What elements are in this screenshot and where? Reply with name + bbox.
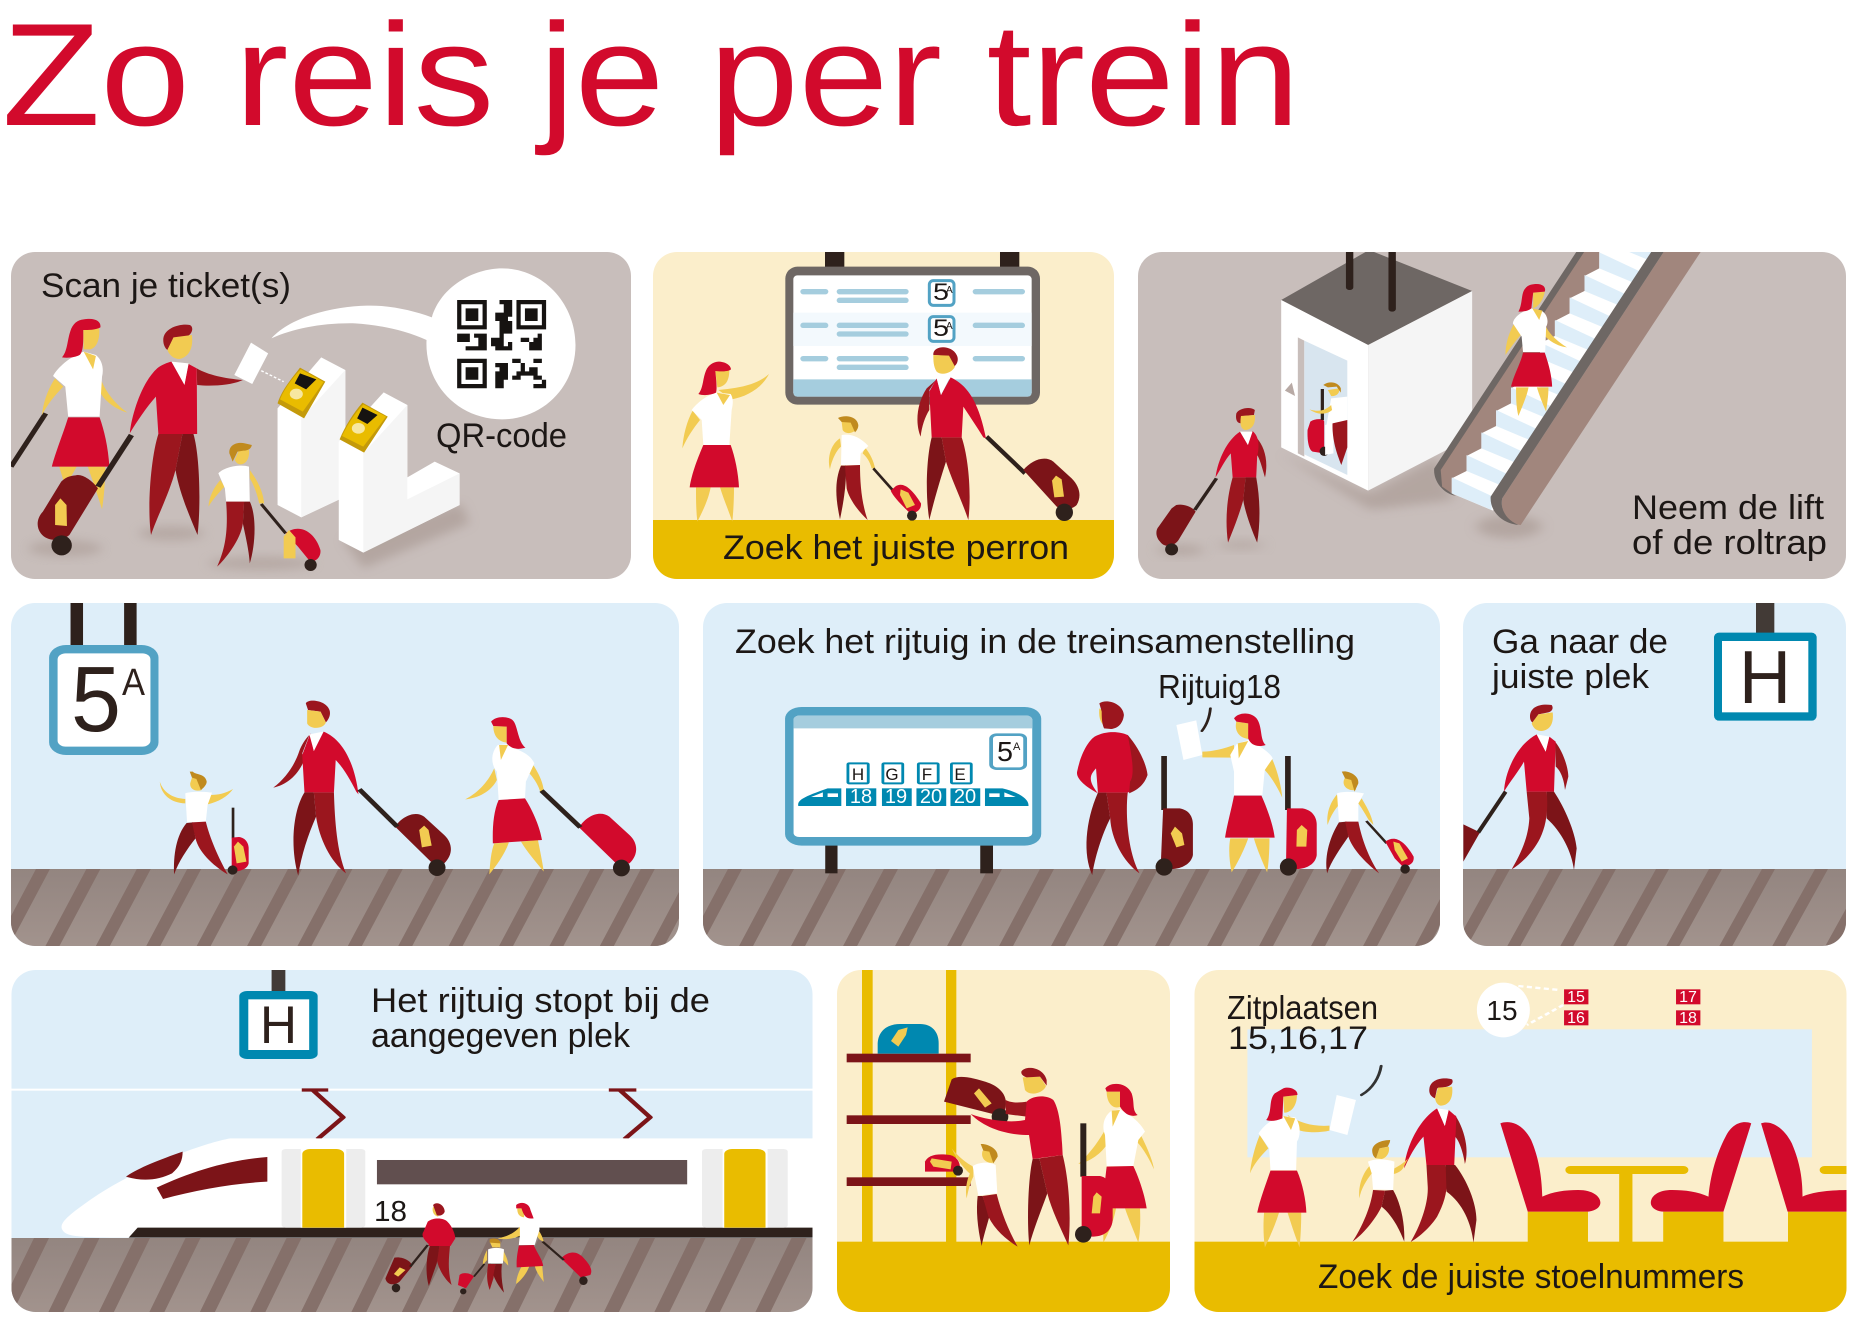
figure: man holding ticket xyxy=(130,325,284,535)
panel: scan je ticket xyxy=(11,252,631,579)
seat labels: 15 xyxy=(1567,989,1585,1006)
icon: ticket gates xyxy=(278,357,460,553)
text: juiste plek: juiste plek xyxy=(1491,658,1650,696)
luggage rack xyxy=(847,968,971,1243)
suitcase: dark red xyxy=(1156,756,1193,876)
coach number 18: 18 xyxy=(374,1196,407,1228)
seat labels xyxy=(1567,989,1697,1027)
figure: woman holding ticket xyxy=(1250,1066,1381,1247)
seat labels: 17 xyxy=(1679,989,1697,1006)
coach numbers: 20 xyxy=(920,786,942,808)
sign letter A: A xyxy=(122,662,146,704)
panel: neem de lift of de roltrap xyxy=(1138,246,1846,579)
suitcase: red xyxy=(1280,756,1317,876)
text: ga naar de: Ga naar de xyxy=(1492,623,1668,661)
panel: zoek de juiste stoelnummers xyxy=(1185,970,1855,1315)
sign number 5A (upper): 5 xyxy=(933,279,949,306)
platform ground xyxy=(703,869,1440,946)
text: neem de lift: Neem de lift xyxy=(1632,489,1825,527)
figure: small man xyxy=(385,1203,455,1292)
sign letter H: H xyxy=(1739,635,1791,719)
figure: man with suitcase xyxy=(917,347,1079,521)
figure: man lifting suitcase xyxy=(944,1068,1070,1245)
coach numbers: 19 xyxy=(885,786,907,808)
seat labels: 18 xyxy=(1679,1010,1697,1027)
sign frame H xyxy=(239,968,318,1059)
figure: child with suitcase xyxy=(829,416,921,521)
sign letter H: H xyxy=(260,996,297,1055)
figure: child with arms out xyxy=(160,772,249,875)
board sign A: A xyxy=(1013,741,1021,753)
text: aangegeven plek: aangegeven plek xyxy=(371,1017,631,1055)
text: seat numbers: 15,16,17 xyxy=(1228,1020,1368,1056)
figure: woman on escalator xyxy=(1505,284,1567,416)
figure: child with suitcase xyxy=(209,443,320,571)
figure: woman with suitcase xyxy=(11,319,131,555)
pantographs xyxy=(302,1090,650,1139)
board sign 5: 5 xyxy=(997,736,1013,767)
panel: zoek het rijtuig xyxy=(703,603,1440,946)
coach numbers xyxy=(850,786,976,808)
suitcase: blue on rack xyxy=(878,1024,939,1054)
figure: child xyxy=(1353,1140,1408,1242)
figure: man seen from behind xyxy=(1077,701,1148,875)
figure: child with suitcase xyxy=(1326,771,1414,874)
text: zoek het rijtuig: Zoek het rijtuig in de treinsamenstelling xyxy=(735,623,1355,661)
coach letters: F xyxy=(922,765,932,784)
figure: woman holding paper xyxy=(1176,708,1282,872)
sign frame 5A xyxy=(49,602,158,755)
coach numbers: 18 xyxy=(850,786,872,808)
seat labels: 16 xyxy=(1567,1010,1585,1027)
figure: man xyxy=(1404,1078,1476,1243)
figure: small woman xyxy=(498,1203,591,1285)
text: QR-code: QR-code xyxy=(436,417,567,455)
figure: man with suitcase xyxy=(273,701,451,876)
panel: luggage rack xyxy=(830,968,1197,1315)
coach letters: E xyxy=(954,765,966,784)
panel: ga naar de juiste plek xyxy=(1463,602,1846,946)
coach letters: H xyxy=(852,765,864,784)
text: het rijtuig stopt bij de: Het rijtuig stopt bij de xyxy=(371,982,710,1020)
train window xyxy=(1247,1029,1812,1157)
text: rijtuig 18: Rijtuig18 xyxy=(1158,668,1281,705)
icon: escalator xyxy=(1434,246,1702,525)
text: zitplaatsen: Zitplaatsen xyxy=(1227,989,1378,1026)
platform ground xyxy=(11,1238,813,1312)
sign number 5A (lower): 5 xyxy=(933,315,949,342)
coach numbers: 20 xyxy=(954,786,976,808)
figure: woman with suitcase xyxy=(465,717,636,876)
platform ground xyxy=(11,869,679,946)
figure: man with suitcase xyxy=(1156,408,1266,555)
panel: het rijtuig stopt xyxy=(11,968,815,1312)
platform ground xyxy=(1463,869,1846,946)
sign frame H xyxy=(1714,602,1817,721)
sign letter A (lower): A xyxy=(946,321,953,332)
figure: woman with suitcase xyxy=(1075,1084,1154,1243)
text: zoek de juiste stoelnummers: Zoek de juiste stoelnummers xyxy=(1318,1258,1744,1296)
sign number 5: 5 xyxy=(71,647,121,751)
figure: man walking xyxy=(1463,705,1577,870)
seat number callout xyxy=(1477,983,1700,1037)
text: zoek het juiste perron: Zoek het juiste perron xyxy=(723,529,1069,567)
text: of de roltrap: of de roltrap xyxy=(1632,524,1827,562)
figure: child with small suitcase xyxy=(925,1144,1018,1247)
sign letter A (upper): A xyxy=(946,285,953,296)
figure: woman pointing xyxy=(682,362,769,522)
text: scan je ticket: Scan je ticket(s) xyxy=(41,267,291,305)
icon: elevator xyxy=(1281,250,1472,491)
train composition board xyxy=(785,707,1041,873)
train seats and table xyxy=(1500,1122,1855,1242)
coach letters xyxy=(852,765,966,784)
train xyxy=(62,1138,815,1238)
figure: small child xyxy=(458,1239,508,1294)
panel: platform 5A xyxy=(11,602,679,946)
panel: zoek het juiste perron xyxy=(653,252,1114,579)
departure board xyxy=(785,250,1040,405)
icon: QR code xyxy=(457,300,546,388)
coach letters: G xyxy=(885,765,899,784)
speech bubble with QR code xyxy=(271,268,576,419)
callout seat number: 15 xyxy=(1486,995,1518,1026)
figure: child in elevator xyxy=(1307,382,1347,465)
